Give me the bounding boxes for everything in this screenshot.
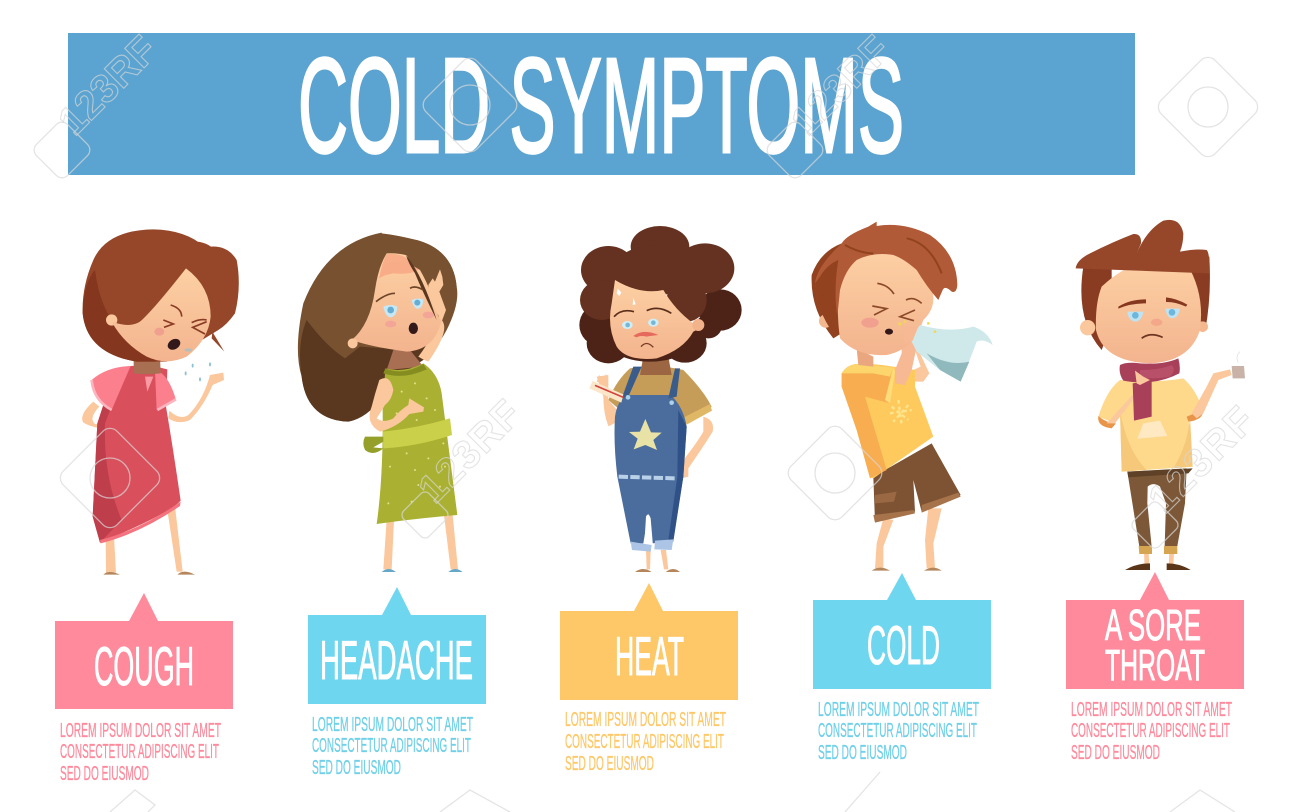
face <box>838 250 933 355</box>
character: girl coughing <box>82 229 239 575</box>
back arm <box>913 350 929 382</box>
face <box>1096 260 1201 363</box>
shirt <box>842 364 933 478</box>
brows <box>1118 297 1187 309</box>
neck <box>133 353 161 374</box>
description: heat: CONSECTETUR ADIPISCING ELIT <box>565 731 724 753</box>
watermarks: 123RF <box>783 28 899 144</box>
eyes <box>163 305 207 334</box>
label: a sore throat: THROAT <box>1105 641 1205 690</box>
cuffs <box>631 539 673 552</box>
blush <box>385 321 396 327</box>
dress <box>93 365 181 543</box>
hair lock <box>186 242 227 352</box>
mouth <box>885 329 893 335</box>
hair back <box>1081 257 1210 350</box>
shorts <box>873 443 961 522</box>
label: headache <box>308 587 486 704</box>
hair front strands <box>405 240 457 317</box>
sneeze spray <box>898 320 936 333</box>
description: headache: CONSECTETUR ADIPISCING ELIT <box>312 735 471 757</box>
handkerchief <box>910 325 993 382</box>
trousers <box>1127 468 1187 547</box>
arm to nose <box>895 333 916 385</box>
watermarks: 123RF <box>1140 398 1263 521</box>
label: headache: HEADACHE <box>320 629 473 691</box>
fingers <box>902 327 918 343</box>
ear <box>106 314 117 326</box>
cuffs <box>1139 546 1177 554</box>
overalls <box>615 395 687 543</box>
fever flush <box>379 254 418 278</box>
shirt highlight <box>1137 421 1167 439</box>
hair top <box>815 222 957 333</box>
description: heat <box>565 709 726 775</box>
description: cold: CONSECTETUR ADIPISCING ELIT <box>818 720 977 742</box>
title banner <box>68 30 1135 181</box>
character: girl with headache <box>298 233 463 572</box>
face <box>112 268 211 361</box>
description: cough: CONSECTETUR ADIPISCING ELIT <box>60 741 219 763</box>
sun print <box>890 400 912 425</box>
label: a sore throat: A SORE <box>1105 601 1201 650</box>
description: heat: LOREM IPSUM DOLOR SIT AMET <box>565 709 726 731</box>
description: cold <box>818 699 979 764</box>
label: a sore throat <box>1066 572 1244 690</box>
hand on throat <box>1135 371 1150 385</box>
buttons <box>626 395 630 400</box>
description: cough <box>60 720 221 785</box>
legs <box>383 515 458 569</box>
eyes <box>1127 309 1180 322</box>
neck <box>857 348 873 367</box>
shirt <box>1098 378 1203 472</box>
description: headache: LOREM IPSUM DOLOR SIT AMET <box>312 714 473 736</box>
description: heat: SED DO EIUSMOD <box>565 753 654 775</box>
mouth <box>409 323 418 334</box>
scarf <box>1120 358 1180 383</box>
description: a sore throat: SED DO EIUSMOD <box>1071 742 1160 764</box>
hair back <box>83 229 239 362</box>
hair back <box>298 233 457 422</box>
cup <box>1232 366 1245 378</box>
description: headache <box>312 714 473 779</box>
label: cold <box>813 573 991 689</box>
belt stitches <box>619 477 675 478</box>
star <box>629 419 662 450</box>
description: cough: LOREM IPSUM DOLOR SIT AMET <box>60 720 221 742</box>
label: cough <box>55 593 233 709</box>
arms <box>1107 373 1150 423</box>
face <box>610 280 703 359</box>
dress <box>377 363 457 524</box>
cuffs of sleeves <box>1098 410 1203 428</box>
nose <box>633 332 658 337</box>
brows and eyes <box>872 283 922 321</box>
sweat drops <box>617 288 636 305</box>
legs <box>646 550 668 569</box>
watermarks: 123RF <box>410 392 530 511</box>
right arm <box>673 417 713 478</box>
hair <box>1076 220 1209 273</box>
ear <box>819 314 832 328</box>
legs <box>1144 552 1174 568</box>
neck <box>387 350 423 370</box>
eyes <box>383 298 423 317</box>
mouth <box>166 337 182 352</box>
face <box>352 253 442 352</box>
neck <box>640 357 672 375</box>
description: cough: SED DO EIUSMOD <box>60 763 149 785</box>
nose <box>1151 319 1162 326</box>
thermometer <box>589 381 623 403</box>
description: headache: SED DO EIUSMOD <box>312 757 401 779</box>
description: cold: LOREM IPSUM DOLOR SIT AMET <box>818 699 979 721</box>
blush <box>861 318 879 328</box>
legs <box>106 507 183 573</box>
character: boy sneezing <box>812 222 993 571</box>
dress dots <box>387 382 446 504</box>
shoulder and arm <box>370 378 424 432</box>
left hand <box>597 375 620 426</box>
character: boy with sore throat <box>1076 220 1245 570</box>
hair <box>579 226 742 363</box>
ears <box>1080 320 1095 335</box>
label: cold: COLD <box>867 614 940 676</box>
description: cold: SED DO EIUSMOD <box>818 742 907 764</box>
legs <box>875 508 942 568</box>
watermarks: 123RF <box>50 28 166 144</box>
back arm <box>82 402 137 444</box>
t-shirt <box>608 366 712 423</box>
raised arm <box>418 320 444 362</box>
hair back <box>812 243 855 338</box>
steam <box>1237 352 1240 363</box>
brows and eyes <box>614 308 671 317</box>
droplets <box>184 348 211 381</box>
description: a sore throat <box>1071 699 1232 764</box>
hand <box>428 269 446 322</box>
dress sleeves <box>92 366 131 410</box>
label: heat <box>560 583 738 700</box>
fingers <box>597 374 608 385</box>
mouth <box>1142 335 1163 338</box>
blush <box>154 328 164 336</box>
right arm <box>168 373 224 422</box>
ear <box>348 338 358 348</box>
character: child with thermometer <box>579 226 742 572</box>
label: cough: COUGH <box>94 635 194 697</box>
label: heat: HEAT <box>615 625 684 687</box>
mouth <box>641 343 653 347</box>
leg gap <box>644 515 653 550</box>
